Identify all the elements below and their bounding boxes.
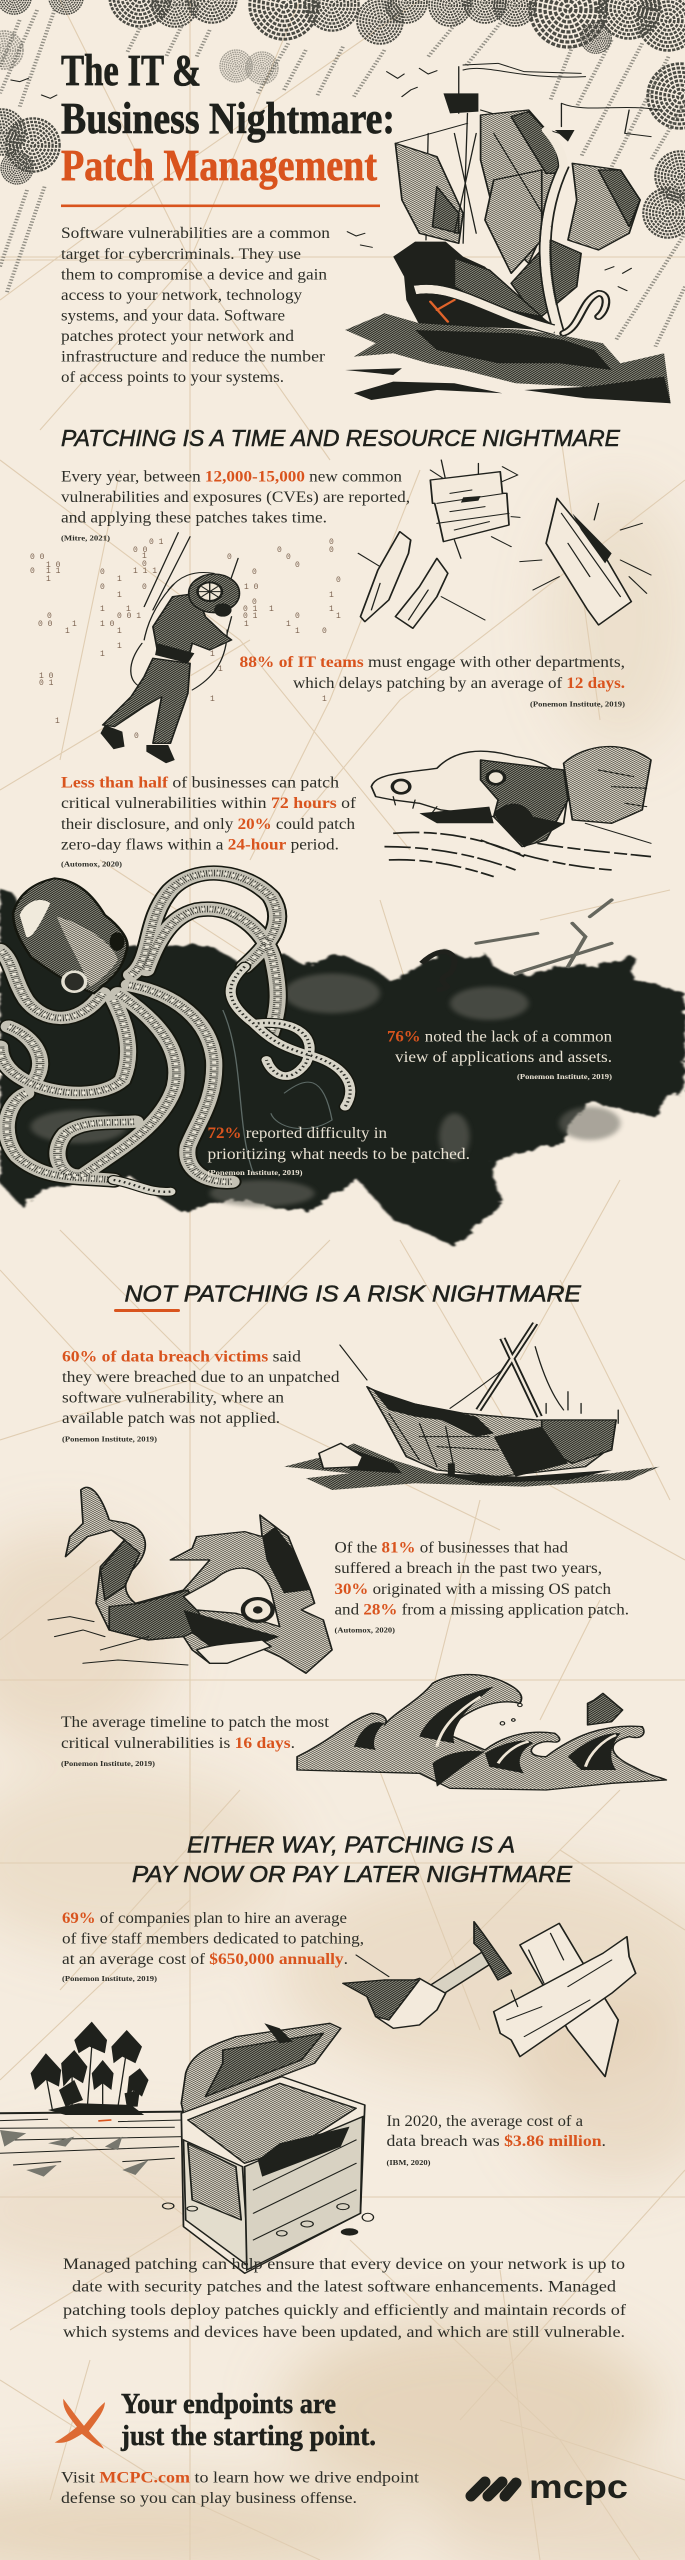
stat: 81% breached: suffered a breach in the past two years, [334,1560,602,1577]
heading: either way, pay now or pay later: EITHER WAY, PATCHING IS A [187,1832,515,1858]
stat: less than half [61,775,357,869]
stat: CVEs per year: and applying these patches takes time. [61,510,327,527]
binary digits around the diver: 0 [47,612,52,621]
call to action heading [120,2388,376,2452]
stat: 72% difficulty prioritizing: prioritizing what needs to be patched. [208,1146,470,1163]
binary code rain [0,10,685,347]
stat: $3.86 million: In 2020, the average cost of a [386,2113,583,2130]
binary digits around the diver: 1 [117,642,122,651]
stat: 81% breached: 30% originated with a missing OS patch [334,1581,611,1598]
binary digits around the diver: 1 1 1 [133,567,157,576]
binary digits around the diver: 1 0 [244,583,259,592]
binary digits around the diver: 1 [210,695,215,704]
stat: $3.86 million: (IBM, 2020) [386,2158,431,2167]
stat: less than half: critical vulnerabilities within 72 hours of [61,795,357,812]
closing paragraph: managed patching: date with security patches and the latest software enhancements. Managed [72,2279,616,2296]
binary digits around the diver: 0 [142,560,147,569]
stat: 81% breached: (Automox, 2020) [334,1626,396,1635]
stat: 81% breached [334,1540,629,1635]
binary digits around the diver: 1 [46,575,51,584]
title [61,46,395,190]
intro paragraph: patches protect your network and [61,328,294,345]
illustration: deep sea diver [100,533,239,763]
illustration: broken wooden planks [358,460,651,628]
binary digits around the diver: 1 [322,695,327,704]
binary digits around the diver: 0 [286,553,291,562]
intro paragraph: systems, and your data. Software [61,308,285,324]
binary digits around the diver: 1 [329,605,334,614]
binary digits around the diver: 1 0 [46,561,61,570]
stat: 69% hire staff: at an average cost of $650,000 annually . [62,1951,348,1968]
title: Business Nightmare: [61,94,395,143]
heading: either way, pay now or pay later [132,1832,573,1887]
illustration: shipwreck [284,1323,660,1490]
heading: either way, pay now or pay later: PAY NOW OR PAY LATER NIGHTMARE [132,1861,573,1887]
intro paragraph: infrastructure and reduce the number [61,348,326,366]
stat: 76% common view: 76% noted the lack of a common [387,1029,612,1046]
binary digits around the diver: 0 [134,732,139,741]
binary digits around the diver: 0 [295,612,300,621]
binary digits around the diver: 1 0 [100,620,115,629]
stat: 60% of data breach victims: available patch was not applied. [62,1410,280,1427]
logo: mcpc: mcpc [529,2468,628,2505]
intro paragraph: of access points to your systems. [61,369,284,386]
binary digits around the diver: 0 [295,561,300,570]
stat: less than half: (Automox, 2020) [61,860,123,869]
stat: 88% of IT teams: (Ponemon Institute, 2019) [530,700,626,709]
binary digits around the diver: 0 [100,583,105,592]
clouds of binary code [0,0,685,238]
call to action heading: Your endpoints are [121,2388,336,2420]
binary digits around the diver: 0 [142,583,147,592]
icon: orange X [57,2401,104,2447]
illustration: sea monster head in waves [371,747,651,877]
binary digits around the diver: 1 [117,591,122,600]
binary digits around the diver: 1 [269,605,274,614]
call to action text: defense so you can play business offense. [61,2490,357,2507]
binary digits around the diver: 1 [244,620,249,629]
stat: 16 days to patch: critical vulnerabilities is 16 days . [61,1735,295,1752]
stat: 69% hire staff: 69% of companies plan to hire an average [62,1910,347,1927]
stat: less than half: zero-day flaws within a 24-hour period. [61,836,339,854]
binary digits around the diver: 1 [55,717,60,726]
binary digits around the diver: 0 [100,568,105,577]
binary digits around the diver: 0 0 1 [117,612,141,621]
stat: 60% of data breach victims: software vulnerability, where an [62,1390,284,1407]
binary digits around the diver: 1 [65,627,70,636]
illustration: giant octopus [0,873,350,1192]
title underline [61,204,380,207]
call to action text [61,2470,420,2507]
heading: patching is a time and resource nightmare: PATCHING IS A TIME AND RESOURCE NIGHTMARE [61,425,621,451]
binary digits around the diver: 1 [117,627,122,636]
stat: 81% breached: and 28% from a missing application patch. [334,1602,629,1618]
stat: 69% hire staff: (Ponemon Institute, 2019) [62,1974,158,1983]
binary digits around the diver: 0 0 [38,620,53,629]
stat: 16 days to patch: (Ponemon Institute, 2019) [61,1759,156,1768]
stat: CVEs per year: Every year, between 12,000-15,000 new common [61,469,402,486]
closing paragraph: managed patching: Managed patching can help ensure that every device on your network is up to [63,2256,625,2273]
stat: CVEs per year [61,469,410,543]
stat: 60% of data breach victims [62,1349,340,1444]
closing paragraph: managed patching: which systems and devices have been updated, and which are still vulnerable. [63,2324,625,2341]
stat: CVEs per year: vulnerabilities and exposures (CVEs) are reported, [61,489,410,506]
binary digits around the diver: 1 0 [39,672,54,681]
stat: 76% common view: (Ponemon Institute, 2019) [517,1072,613,1081]
illustration: palm tree island [0,2022,183,2177]
binary digits around the diver: 0 1 [149,538,164,547]
illustration: treasure chest [163,2023,374,2273]
stat: 88% of IT teams: which delays patching by an average of 12 days. [293,675,625,692]
intro paragraph [61,225,330,386]
binary digits around the diver: 0 [252,568,257,577]
stat: 76% common view [387,1029,613,1081]
binary digits around the diver: 0 [322,627,327,636]
title: The IT & [61,46,201,95]
title: Patch Management [61,141,377,190]
call to action heading: just the starting point. [120,2420,376,2452]
stat: $3.86 million [386,2113,606,2167]
stat: 16 days to patch: The average timeline to patch the most [61,1714,330,1731]
stat: 76% common view: view of applications and assets. [395,1049,612,1066]
binary digits around the diver: 0 1 [243,605,258,614]
binary digits around the diver: 0 [336,576,341,585]
binary digits around the diver [30,538,341,741]
stat: 16 days to patch [61,1714,330,1768]
binary digits around the diver: 1 [210,650,215,659]
stat: less than half: their disclosure, and only 20% could patch [61,816,355,833]
intro paragraph: them to compromise a device and gain [61,266,327,284]
stat: 88% of IT teams [240,654,626,709]
intro paragraph: access to your network, technology [61,287,302,304]
illustration: sea serpent fish [48,1487,332,1673]
stat: 81% breached: Of the 81% of businesses that had [334,1540,568,1557]
heading: not patching is a risk nightmare: NOT PATCHING IS A RISK NIGHTMARE [124,1281,582,1307]
ink cloud [0,888,685,1247]
intro paragraph: target for cybercriminals. They use [61,246,301,263]
stat: 72% difficulty prioritizing: (Ponemon Institute, 2019) [208,1168,303,1177]
binary digits around the diver: 1 [329,591,334,600]
binary digits around the diver: 1 1 [46,567,61,576]
binary digits around the diver: 0 [252,598,257,607]
binary digits around the diver: 1 [218,665,223,674]
stat: 60% of data breach victims: 60% of data breach victims said [62,1349,301,1366]
binary digits around the diver: 1 [126,605,131,614]
stat: 60% of data breach victims: they were breached due to an unpatched [62,1369,340,1386]
binary digits around the diver: 0 [30,567,35,576]
binary digits around the diver: 0 0 [30,553,45,562]
intro paragraph: Software vulnerabilities are a common [61,225,330,242]
stat: 72% difficulty prioritizing: 72% reported difficulty in [208,1125,387,1142]
binary digits around the diver: 0 [277,546,282,555]
binary digits around the diver: 1 [100,650,105,659]
binary digits around the diver: 0 [227,553,232,562]
binary digits around the diver: 1 [336,612,341,621]
call to action text: Visit MCPC.com to learn how we drive endpoint [61,2470,420,2487]
binary digits around the diver: 0 0 [133,546,148,555]
binary digits around the diver: 0 [329,546,334,555]
illustration: great waves with small ship [297,1675,666,1790]
stat: less than half: Less than half of businesses can patch [61,775,339,792]
stat: 69% hire staff: of five staff members dedicated to patching, [62,1931,364,1948]
binary digits around the diver: 1 [142,552,147,561]
binary digits around the diver: 1 [295,627,300,636]
stat: 69% hire staff [62,1910,364,1983]
logo: mcpc [471,2468,628,2505]
illustration: sailing ship with kraken tentacles [11,63,671,403]
stat: $3.86 million: data breach was $3.86 million . [386,2133,606,2150]
stat: 88% of IT teams: 88% of IT teams must engage with other departments, [240,654,625,671]
binary digits around the diver: 0 1 [243,612,258,621]
binary digits around the diver: 1 [286,620,291,629]
closing paragraph: managed patching [63,2256,627,2341]
stat: 60% of data breach victims: (Ponemon Institute, 2019) [62,1435,158,1444]
binary digits around the diver: 1 [117,575,122,584]
closing paragraph: managed patching: patching tools deploy patches quickly and efficiently and maintain records of [63,2302,627,2319]
binary digits around the diver: 1 [72,620,77,629]
illustration: hand with hammer and planks [343,1922,636,2077]
binary digits around the diver: 0 1 [39,679,54,688]
stat: CVEs per year: (Mitre, 2021) [61,534,111,543]
stat: 72% difficulty prioritizing [208,1125,470,1177]
binary digits around the diver: 1 [100,605,105,614]
binary digits around the diver: 0 [329,538,334,547]
